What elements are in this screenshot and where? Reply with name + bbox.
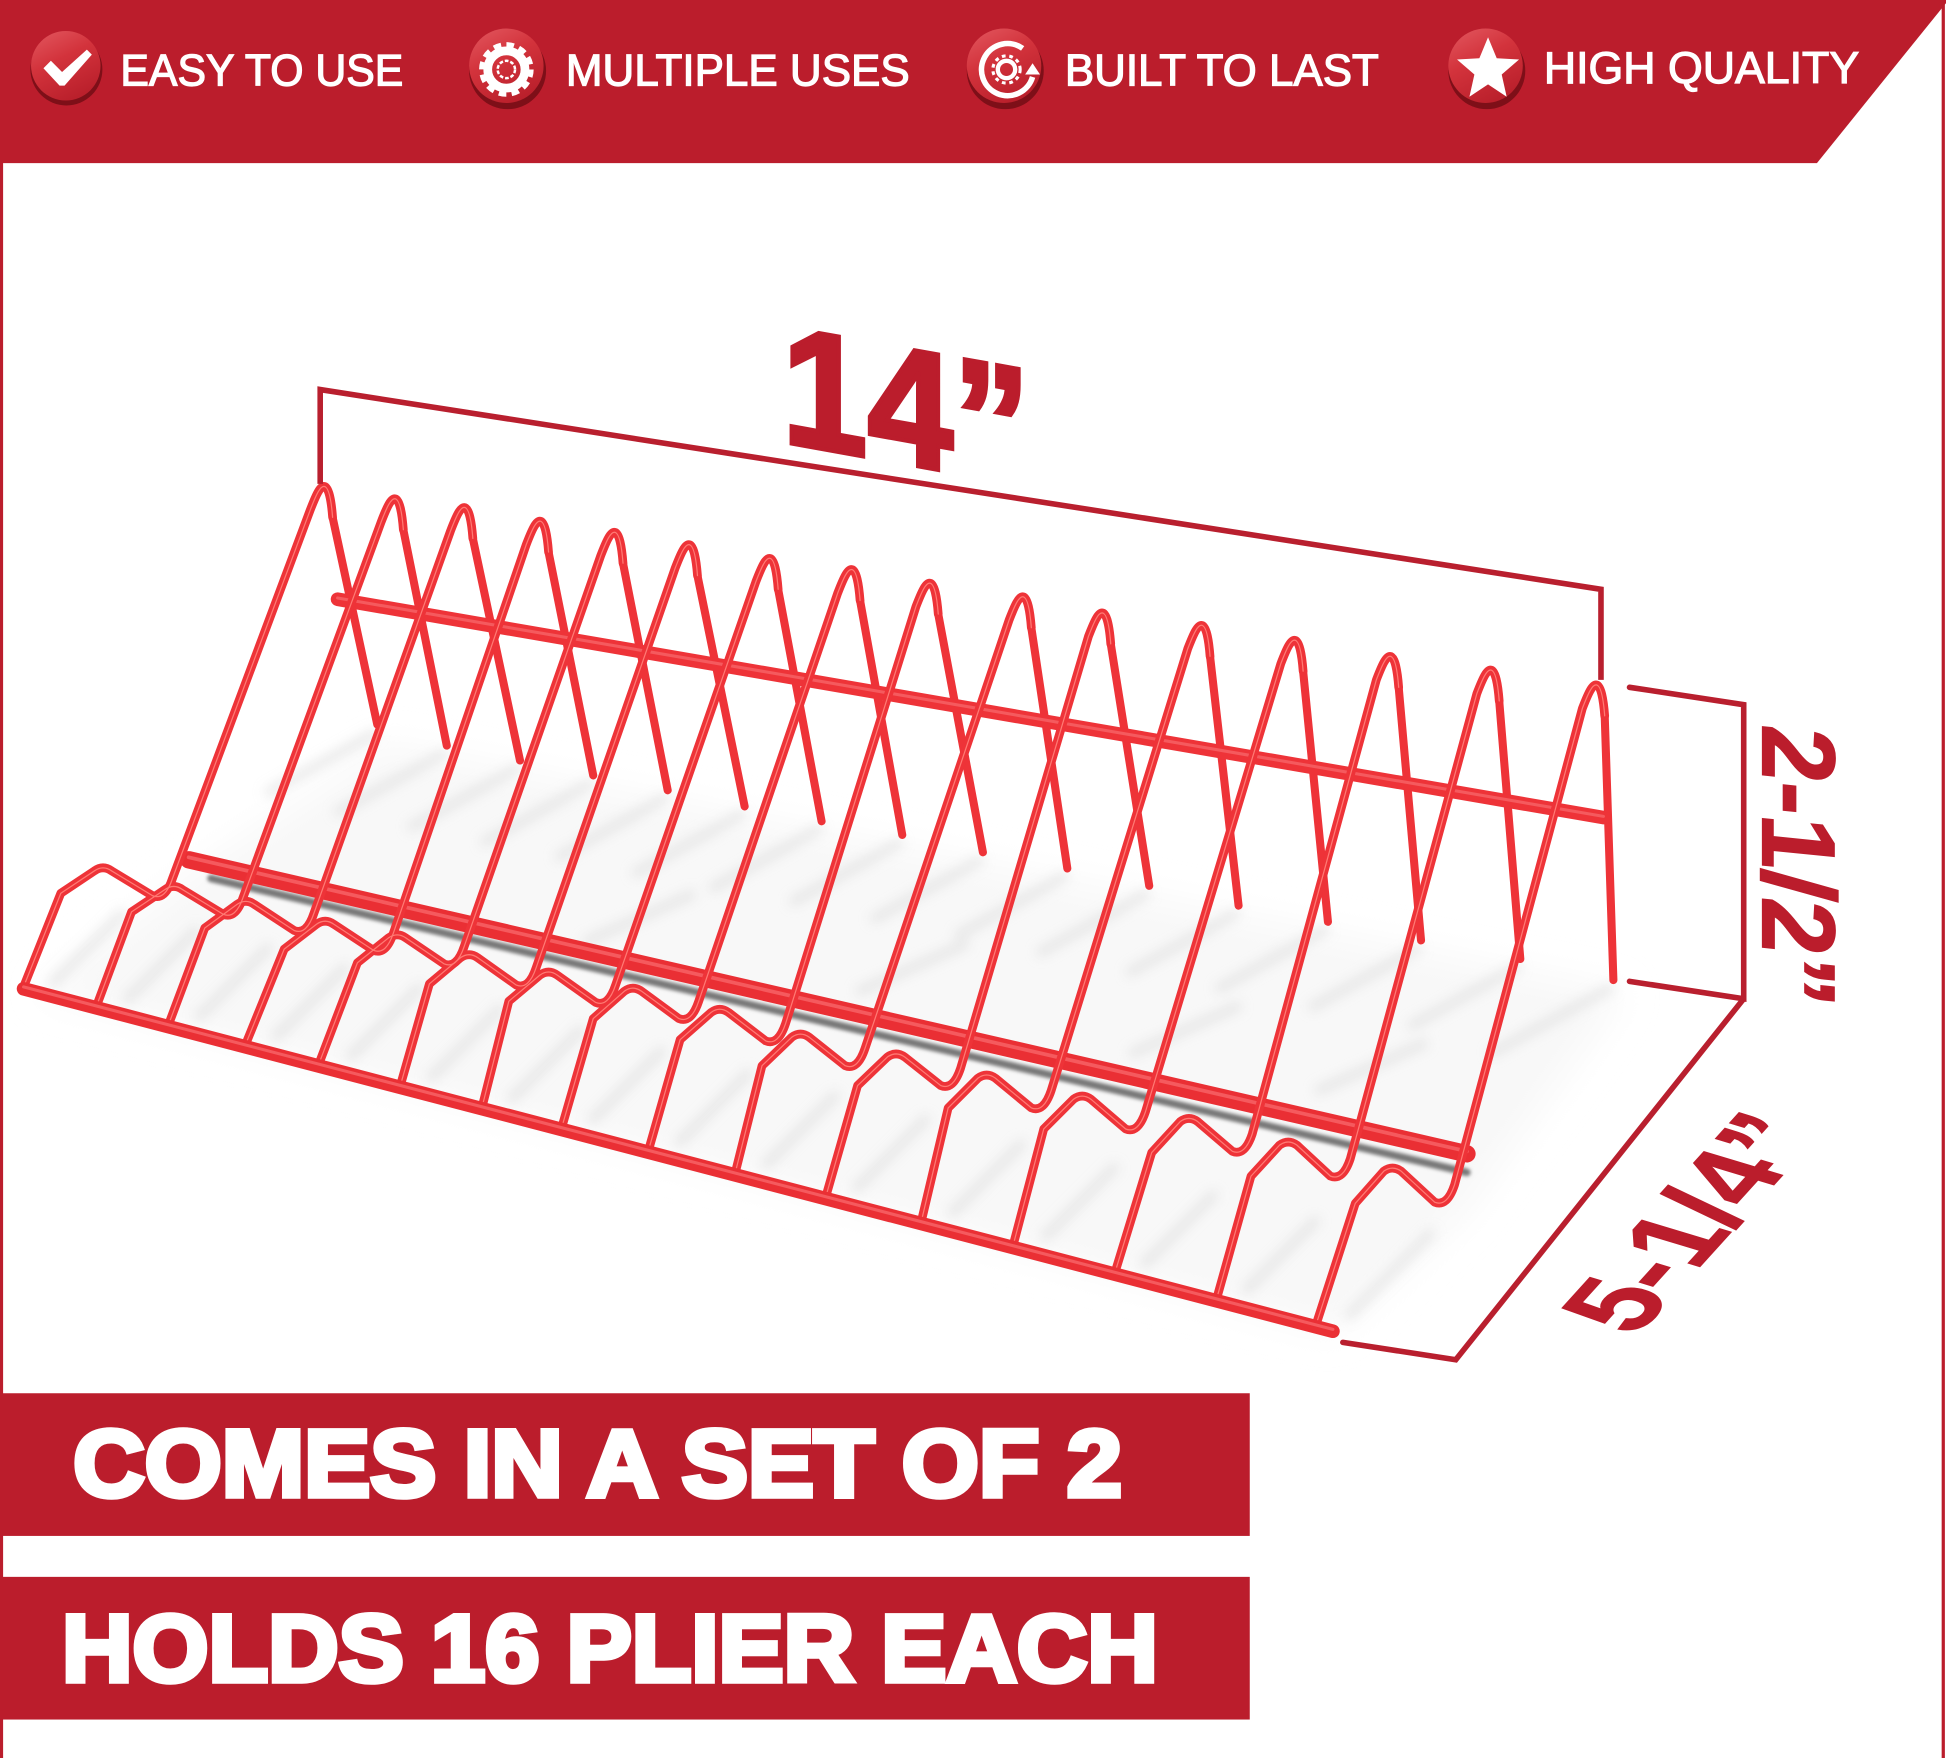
upper cross bar [338, 598, 1603, 818]
lower cross bar [189, 857, 1467, 1154]
feature: easy to use [30, 31, 403, 105]
dimension: height 2-1/2 inches: 2-1/2” [1739, 721, 1856, 1011]
banner: comes in a set of 2 [0, 1393, 1250, 1536]
feature: easy to use: EASY TO USE [120, 47, 403, 96]
dimension: depth 5-1/4 inches [1343, 999, 1848, 1360]
front base rail [24, 987, 1333, 1331]
feature: high quality [1448, 29, 1859, 109]
wire plier rack [22, 486, 1613, 1331]
feature: high quality: HIGH QUALITY [1544, 44, 1859, 93]
lower bar shadow [211, 878, 1467, 1172]
banner: holds 16 plier each: HOLDS 16 PLIER EACH [62, 1596, 1158, 1701]
rear legs [333, 517, 1613, 980]
top banner [0, 0, 1946, 163]
feature: built to last [967, 29, 1379, 109]
icon: cycle gear badge [967, 29, 1044, 109]
dimension: depth 5-1/4 inches: 5-1/4” [1533, 1100, 1848, 1345]
icon: star badge [1448, 29, 1525, 109]
feature: built to last: BUILT TO LAST [1065, 47, 1379, 96]
floor shadows [37, 732, 1626, 1334]
dimension: width 14 inches: 14” [782, 290, 1030, 522]
banner: holds 16 plier each [0, 1577, 1250, 1720]
feature: multiple uses [469, 29, 910, 109]
icon: gear badge [469, 29, 546, 109]
banner: comes in a set of 2: COMES IN A SET OF 2 [73, 1411, 1122, 1516]
front wire loops [22, 486, 1605, 1326]
feature: multiple uses: MULTIPLE USES [566, 47, 910, 96]
dimension: width 14 inches [320, 290, 1601, 680]
icon: check mark badge [30, 31, 102, 105]
dimension: height 2-1/2 inches [1630, 687, 1856, 1011]
